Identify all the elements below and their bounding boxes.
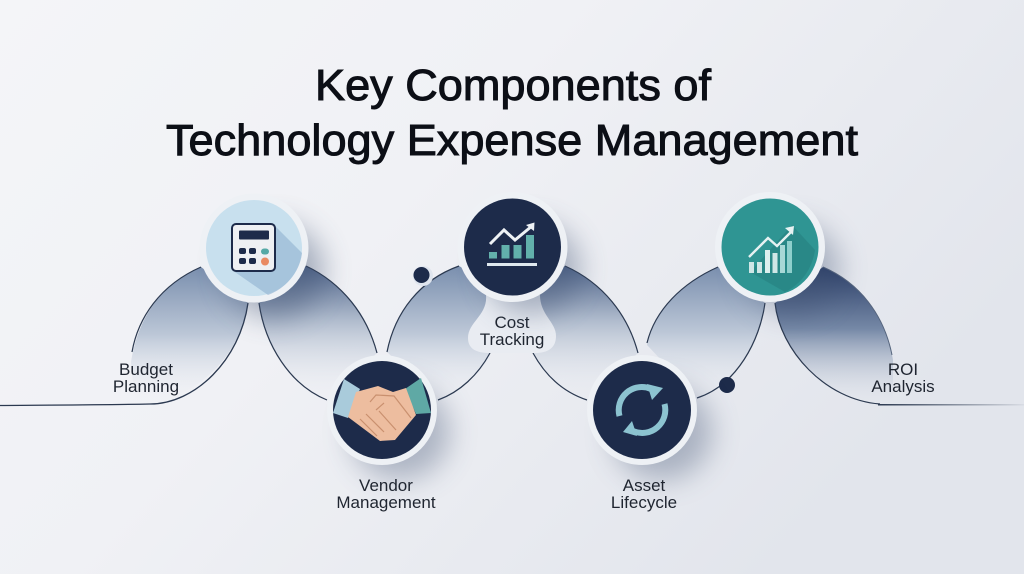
label: budget planning	[113, 360, 179, 396]
connector dot right	[719, 377, 735, 393]
label: asset lifecycle	[611, 476, 677, 512]
label: budget planning: Budget	[119, 360, 173, 379]
cost tracking label blob: Cost	[495, 313, 530, 332]
title: Key Components of	[315, 61, 712, 110]
title: Technology Expense Management	[166, 116, 858, 165]
label: ROI analysis: ROI	[888, 360, 918, 379]
node: ROI analysis	[715, 192, 840, 314]
lens: ROI analysis	[775, 267, 1024, 406]
connector dot left	[413, 266, 433, 286]
label: vendor management: Vendor	[359, 476, 413, 495]
label: asset lifecycle: Lifecycle	[611, 493, 677, 512]
label: budget planning: Planning	[113, 377, 179, 396]
node: vendor management	[327, 355, 450, 480]
lens: vendor to cost	[387, 266, 500, 400]
node: asset lifecycle	[587, 355, 712, 480]
cost tracking label blob	[468, 295, 556, 353]
cost tracking label blob: Tracking	[480, 330, 544, 349]
icon: rising bars with arrow	[749, 225, 815, 292]
icon: handshake	[333, 378, 431, 441]
label: ROI analysis: Analysis	[871, 377, 935, 396]
lens: cost to asset	[525, 266, 638, 400]
label: ROI analysis	[871, 360, 935, 396]
label: vendor management	[336, 476, 436, 512]
title	[166, 61, 858, 165]
label: vendor management: Management	[336, 493, 436, 512]
icon: calculator	[232, 224, 302, 295]
node: cost tracking	[458, 192, 580, 314]
icon: bar chart with trend line	[487, 222, 537, 266]
lens: asset to ROI	[647, 267, 765, 398]
lens: budget to vendor	[259, 266, 377, 400]
icon: refresh arrows	[619, 384, 665, 436]
node: budget planning	[200, 194, 324, 318]
lens: budget planning left	[0, 267, 248, 406]
panel: arcs and lens shapes	[0, 266, 1024, 406]
label: asset lifecycle: Asset	[623, 476, 666, 495]
